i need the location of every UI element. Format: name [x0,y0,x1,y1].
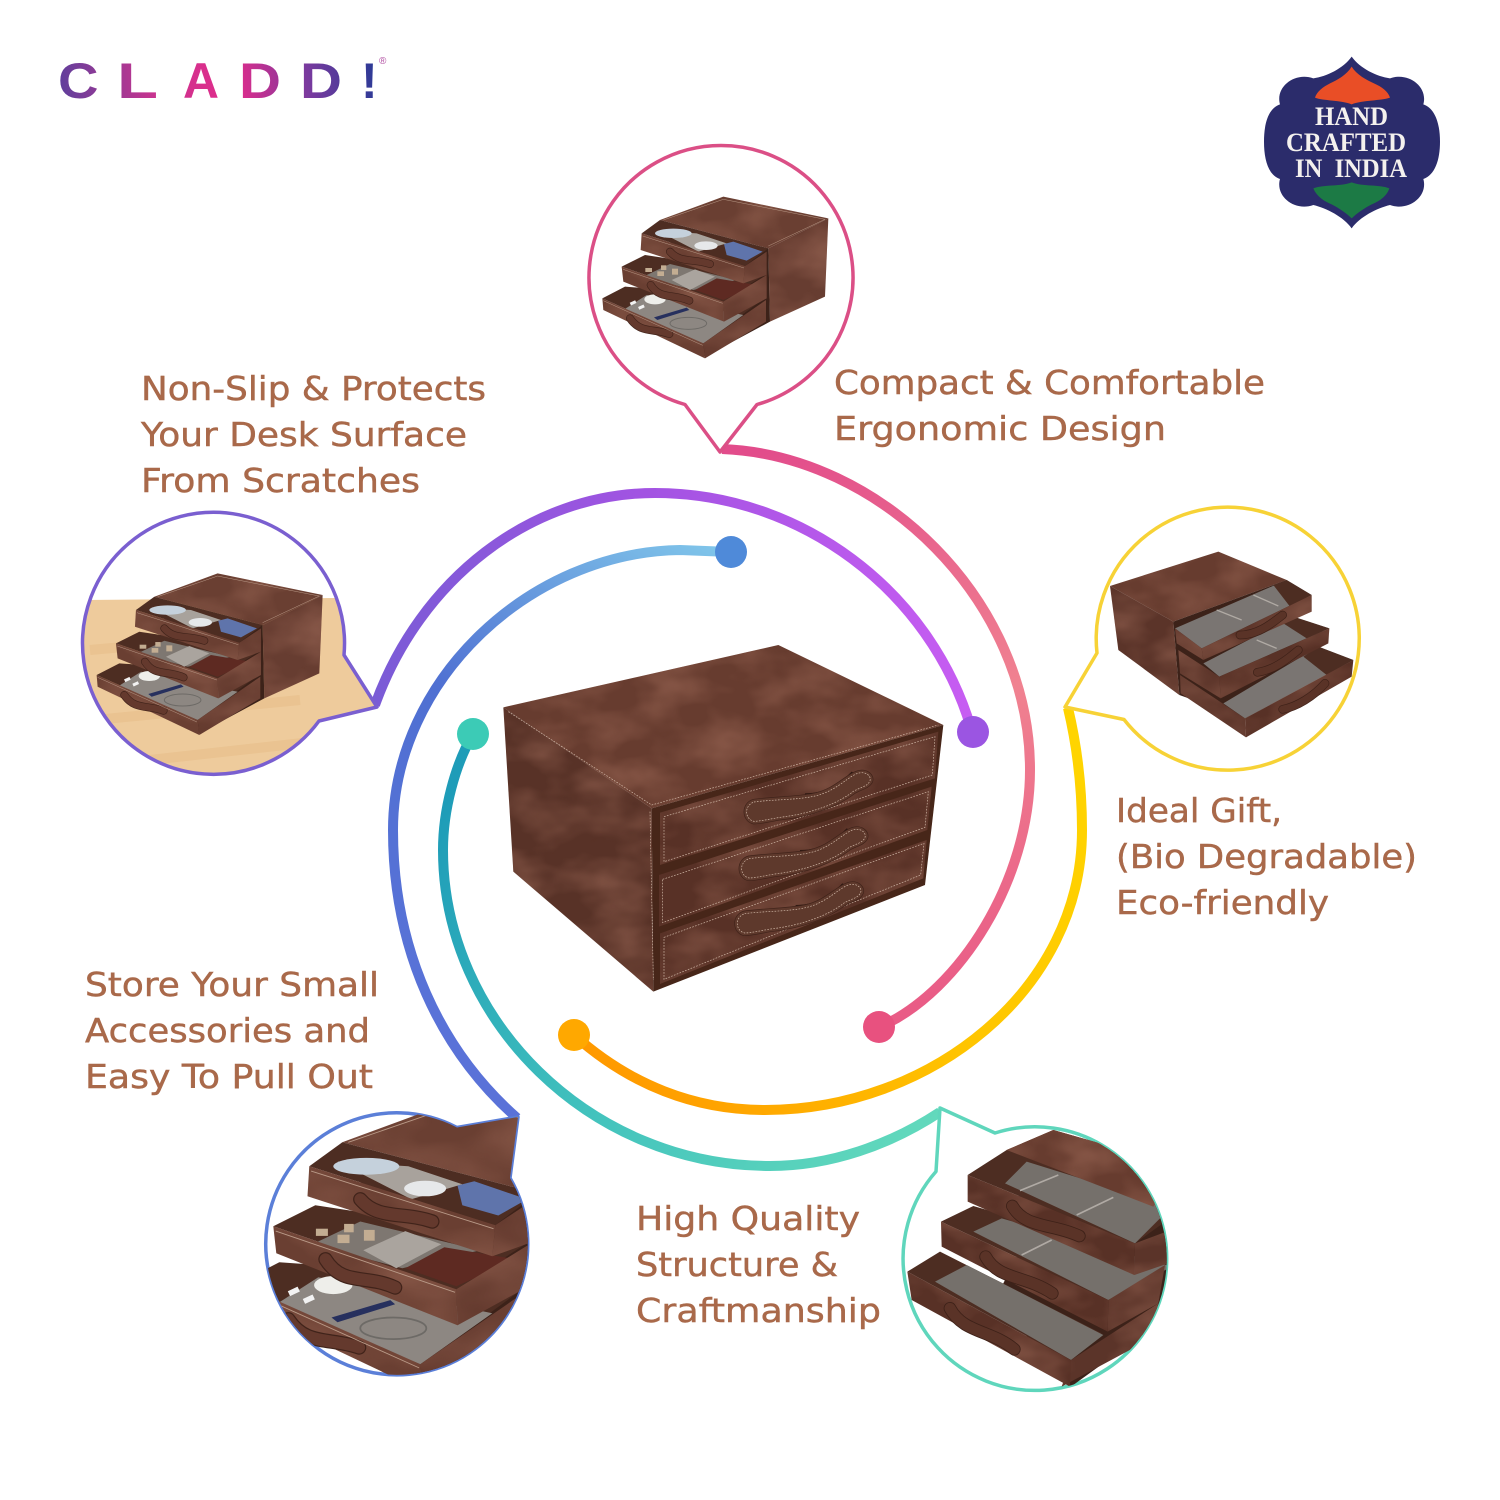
photo: close-up of empty drawers [907,1130,1182,1387]
handle: top drawer [744,770,873,824]
logo: CLADD!: L [117,53,158,109]
text: ideal gift: Ideal Gift, [1116,791,1282,830]
text: high quality: Craftmanship [636,1291,881,1330]
text: compact design: Compact & Comfortable [834,363,1265,402]
text: ideal gift: Eco-friendly [1116,883,1329,922]
arc: yellow to orange [574,708,1082,1110]
panel: ideal gift bubble (yellow) [1065,507,1359,770]
text: ideal gift [1116,791,1417,922]
text: non-slip: Your Desk Surface [140,415,467,454]
logo: CLADD!: D [300,53,342,109]
arc: purple [375,493,971,728]
badge: hand crafted in India: HAND [1315,102,1388,131]
text: small accessories: Store Your Small [85,965,379,1004]
photo: close-up of drawers with accessories [268,1114,528,1375]
panel: high quality bubble (teal) [903,1108,1182,1390]
photo: empty drawers, opposite angle [1110,552,1353,737]
text: compact design: Ergonomic Design [834,409,1166,448]
dot: purple [957,716,989,748]
badge: hand crafted in India: IN INDIA [1295,154,1407,183]
arc: blue [393,550,731,1118]
handle: middle drawer [739,827,868,881]
badge: hand crafted in India: CRAFTED [1286,128,1406,157]
text: small accessories [85,965,379,1096]
text: ideal gift: (Bio Degradable) [1116,837,1417,876]
text: non-slip [140,369,486,500]
text: compact design [834,363,1265,448]
dot: teal [457,718,489,750]
photo: open drawers with accessories [602,197,828,358]
text: non-slip: From Scratches [141,461,420,500]
dot: orange [558,1019,590,1051]
logo: CLADD!: ® [379,56,387,67]
badge: hand crafted in India [1264,57,1440,228]
text: small accessories: Easy To Pull Out [85,1057,373,1096]
text: high quality [636,1199,881,1330]
panel: non-slip bubble (purple) [80,512,377,790]
logo: CLADD!: ! [361,53,378,109]
arc: pink [722,449,1030,1026]
text: high quality: High Quality [636,1199,860,1238]
panel: small accessories bubble (blue) [264,1111,530,1377]
panel: compact design bubble (pink) [589,146,853,452]
logo: CLADD! [58,53,387,109]
logo: CLADD!: D [239,53,281,109]
text: small accessories: Accessories and [85,1011,370,1050]
photo: wooden desk surface [84,598,374,773]
logo: CLADD!: A [183,53,219,109]
dot: blue [715,536,747,568]
arc: teal [443,734,940,1166]
text: high quality: Structure & [636,1245,838,1284]
handle: bottom drawer [735,882,864,936]
main product: closed leather drawer box [503,645,943,992]
dot: pink [863,1011,895,1043]
text: non-slip: Non-Slip & Protects [141,369,486,408]
photo: open drawers on desk [97,573,323,735]
logo: CLADD!: C [58,53,98,109]
